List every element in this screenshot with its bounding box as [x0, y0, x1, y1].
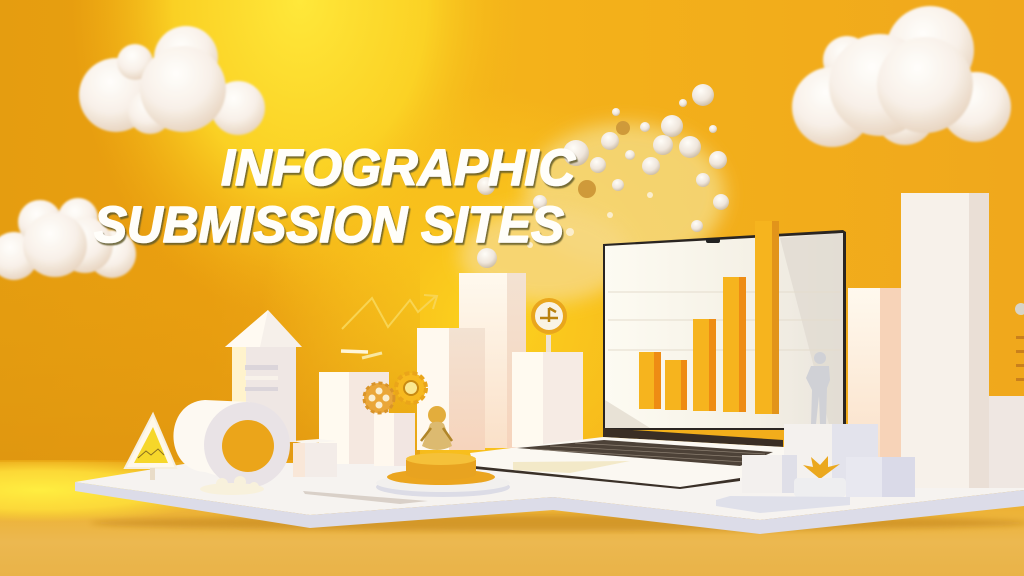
flat plate	[716, 496, 850, 513]
laptop screen	[603, 230, 846, 447]
title: INFOGRAPHIC	[221, 139, 576, 196]
warning triangle sign	[125, 414, 176, 480]
box far right	[989, 396, 1024, 488]
cloud: top left	[79, 26, 265, 135]
note strip	[303, 491, 428, 504]
pedestal under sign	[512, 352, 583, 447]
title	[94, 139, 576, 253]
laptop keyboard base	[470, 437, 784, 489]
floor	[0, 460, 1024, 576]
circular sign on post	[533, 300, 565, 355]
ring cylinder	[174, 400, 290, 488]
right edge figure	[1015, 303, 1024, 381]
tall column right front	[901, 193, 989, 488]
bar chart	[639, 221, 779, 414]
column group back	[319, 273, 526, 466]
particle cloud	[460, 84, 729, 303]
tall column right back	[848, 288, 901, 463]
arrow block	[225, 310, 302, 442]
small cube left	[293, 439, 337, 477]
cloud: mid left	[0, 198, 136, 280]
rubble pile	[200, 476, 264, 495]
zigzag trend arrow	[341, 295, 437, 358]
title: SUBMISSION SITES	[94, 196, 564, 253]
pedestal boxes right	[742, 424, 915, 497]
potted plant	[794, 456, 846, 497]
figure on coin podium	[376, 406, 510, 497]
platform	[75, 463, 1024, 534]
gears	[364, 373, 426, 413]
cloud: top right	[792, 6, 1011, 147]
standing figure	[806, 352, 830, 424]
